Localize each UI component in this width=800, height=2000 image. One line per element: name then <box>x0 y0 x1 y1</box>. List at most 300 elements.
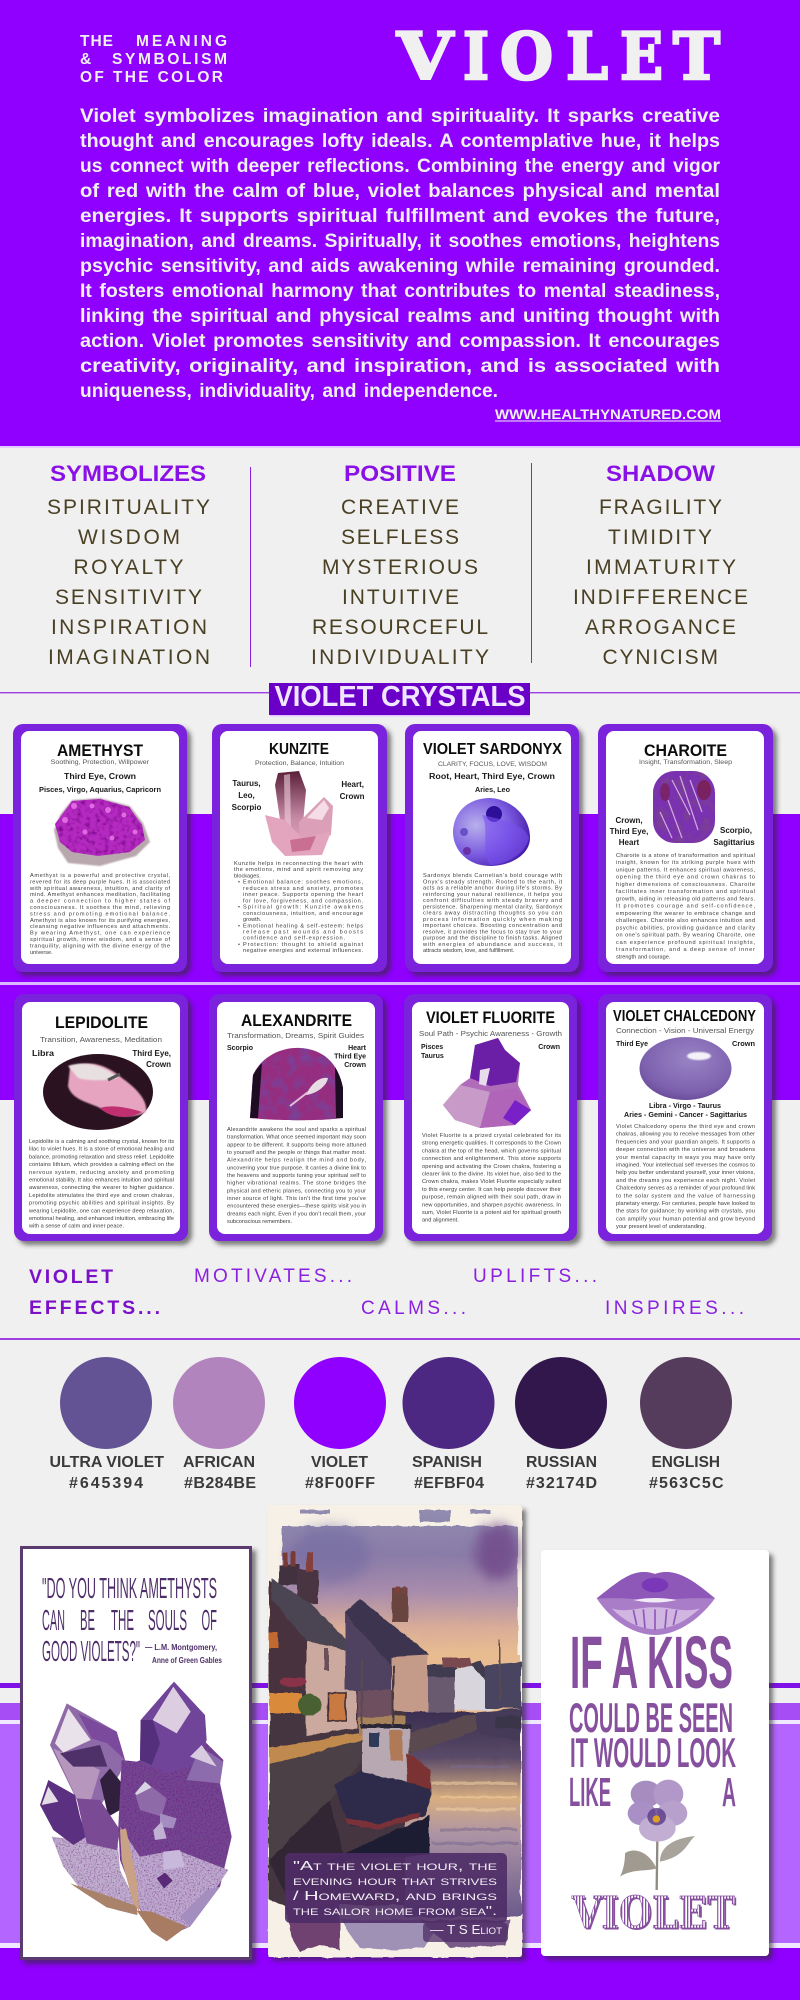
icon: chalcedony stone <box>640 1037 732 1100</box>
card properties: Transition, Awareness, Meditation <box>40 1035 162 1044</box>
card description: facilitates inner transformation and spiritual <box>616 889 755 895</box>
card: kunzite <box>212 724 387 972</box>
header eyebrow: the meaning and symbolism: MEANING <box>136 33 227 50</box>
zodiac label: Aries - Gemini - Cancer - Sagittarius <box>624 1112 747 1119</box>
card: violet sardonyx <box>405 724 579 972</box>
card description: awareness, connecting the wearer to higher guidance. <box>29 1185 174 1191</box>
violet effects text: INSPIRES... <box>605 1298 744 1319</box>
card title: AMETHYST <box>57 741 144 760</box>
intro paragraph: linking the spiritual and physical realms and uniting thought with <box>80 306 720 327</box>
card: alexandrite <box>209 994 383 1241</box>
intro paragraph: of red with the calm of blue, violet balances physical and mental <box>80 181 720 202</box>
zodiac label <box>624 1103 747 1119</box>
middle house <box>345 1600 392 1690</box>
card description: reduces stress and anxiety, promotes <box>243 886 363 892</box>
zodiac label <box>421 1044 444 1060</box>
card description: cleansing negative influences and attachments. <box>30 924 170 930</box>
card description: empowering the wearer to embrace change and <box>616 911 755 917</box>
card description: Amethyst is also known for its purifying energies, <box>30 918 170 924</box>
card description <box>422 1133 562 1224</box>
water <box>405 1712 521 1917</box>
card description: It promotes courage and self-confidence, <box>616 904 755 910</box>
card description: reinforcing your natural resilience, it helps you <box>423 892 562 898</box>
quote headline <box>569 1621 736 1815</box>
quote card: amethysts: "DO YOU THINK AMETHYSTS <box>42 1573 217 1605</box>
card description: strong energetic qualities. It corresponds to the Crown <box>422 1141 561 1147</box>
cream house wall <box>306 1640 357 1735</box>
card description: Spiritual growth: Kunzite awakens <box>243 905 363 911</box>
card description: the emotions, mind and spirit removing any <box>234 867 363 873</box>
quote text: CAN <box>42 1605 65 1637</box>
card description: mind. Amethyst enhances meditation, facilitating <box>30 892 170 898</box>
card: charoite <box>598 724 773 972</box>
intro paragraph: It fosters emotional harmony that contributes to mental steadiness, <box>80 281 720 302</box>
card description: new opportunities, and sharpen psychic awareness. In <box>422 1202 561 1208</box>
card description: imagined. Your intellectual self reverses the cosmos to <box>616 1162 755 1168</box>
card description: uncovering your true purpose. It carries a divine link to <box>227 1165 366 1171</box>
card description: with a sense of calm and inner peace. <box>28 1224 124 1230</box>
card description: can experience profound spiritual insights, <box>616 940 755 946</box>
zodiac label <box>232 779 262 812</box>
quote headline: LIKE <box>569 1769 611 1815</box>
chakra label <box>334 1045 367 1069</box>
painting quote text: the sailor home from sea". <box>293 1904 497 1918</box>
card description: resolve, it provides the focus to stay true to your <box>423 929 562 935</box>
painting quote text: evening hour that strives <box>293 1874 497 1888</box>
card description <box>227 1127 366 1225</box>
card properties: CLARITY, FOCUS, LOVE, WISDOM <box>438 761 547 768</box>
card description: Lepidolite is a calming and soothing crystal, known for its <box>29 1139 174 1145</box>
card description: balance, promoting relaxation and stress relief. Lepidolite <box>29 1154 174 1160</box>
card description: encountered these energies—these spirits visit you in <box>227 1204 366 1210</box>
card description: Alexandrite helps realign the mind and body, <box>227 1158 366 1164</box>
column: symbolizes <box>47 461 210 669</box>
card description: contains lithium, which provides a calming effect on the <box>29 1162 174 1168</box>
intro paragraph <box>80 106 721 402</box>
chakra label: Crown <box>538 1044 560 1051</box>
swatch: ultra violet <box>50 1357 164 1492</box>
list: shadow: IMMATURITY <box>586 556 736 579</box>
zodiac label <box>713 826 755 847</box>
card description: consciousness, intuition, and encourage <box>243 911 363 917</box>
card description: chakra at the top of the head, which governs spiritual <box>422 1148 561 1154</box>
swatch: russian <box>515 1357 607 1492</box>
intro paragraph: psychic sensitivity, and aids awakening while remaining grounded. <box>80 256 720 277</box>
main title: L <box>566 19 608 95</box>
card description: nervous system, reducing anxiety and promoting <box>29 1170 174 1176</box>
intro paragraph: thought and encourages lofty ideals. A contemplative hue, it helps <box>80 131 720 152</box>
painting quote text: — T S Eliot <box>430 1923 503 1937</box>
card description: attracts wisdom, love, and fulfillment. <box>423 948 515 954</box>
card: amethyst <box>13 724 187 972</box>
card description: revered for its deep purple hues. It is associated <box>30 879 170 885</box>
swatch: african: #B284BE <box>184 1475 256 1492</box>
card description <box>616 1124 756 1230</box>
heading: shadow: SHADOW <box>606 461 715 486</box>
card description: Alexandrite awakens the soul and sparks a spiritual <box>227 1127 366 1133</box>
lit windows <box>269 1632 278 1648</box>
drip edges <box>268 1900 522 1957</box>
card description: spiritual growth, inner wisdom, and a sense of <box>30 937 170 943</box>
card description: blockages. <box>234 873 261 879</box>
list: shadow: CYNICISM <box>602 646 718 669</box>
card description: emotional stability. It also enhances intuition and spiritual <box>29 1178 174 1184</box>
card description: deeper connection with the universe and broadens <box>616 1147 755 1153</box>
card description: planetary energy. For centuries, people have looked to <box>616 1201 755 1207</box>
card description: Chalcedony serves as a reminder of your profound link <box>616 1186 755 1192</box>
base dark ground <box>269 1640 405 1905</box>
website link: WWW.HEALTHYNATURED.COM <box>495 406 721 422</box>
chakra label: Crown <box>344 1062 366 1069</box>
card description: inner source of light. This isn't the first time you've <box>227 1196 366 1202</box>
card description: your present level of understanding. <box>616 1224 706 1230</box>
zodiac label: Libra - Virgo - Taurus <box>649 1103 721 1110</box>
icon: charoite stone <box>653 771 715 843</box>
card title: VIOLET SARDONYX <box>423 741 563 758</box>
zodiac label: Scorpio <box>227 1045 253 1052</box>
dark left building <box>269 1580 310 1695</box>
card: violet chalcedony <box>598 994 772 1241</box>
quote text: Anne of Green Gables <box>152 1655 222 1665</box>
header eyebrow: the meaning and symbolism <box>80 33 227 86</box>
card description: appear to be different. It supports being more attuned <box>227 1142 366 1148</box>
chakra label: Third Eye, Crown <box>64 771 136 781</box>
illustration: purple lips <box>597 1572 715 1635</box>
card description: physical and etheric planes, connecting you to your <box>227 1188 366 1194</box>
card title: LEPIDOLITE <box>55 1013 148 1032</box>
violet wordmark: VIOLET <box>573 1890 737 1940</box>
card description: and the dreams you experience each night. Violet <box>616 1178 755 1184</box>
chakra label: Third Eye <box>616 1041 648 1048</box>
list: shadow: INDIFFERENCE <box>573 586 748 609</box>
card description: • <box>238 905 240 911</box>
list: symbolizes: ROYALTY <box>74 556 184 579</box>
card description: psychic abilities, providing guidance and clarity <box>616 925 755 931</box>
intro paragraph: Violet symbolizes imagination and spirituality. It sparks creative <box>80 106 720 127</box>
card description: sum, Violet Fluorite is a potent aid for spiritual growth <box>422 1210 561 1216</box>
card description: purpose, remain aligned with their soul path, draw in <box>422 1195 561 1201</box>
card description: transformation. What once seemed important may soon <box>227 1135 366 1141</box>
violet wordmark: VIOLET <box>571 1888 735 1939</box>
swatch: spanish <box>402 1357 494 1492</box>
zodiac label: Scorpio, <box>720 826 752 835</box>
swatch: african: AFRICAN <box>183 1454 255 1471</box>
chakra label: Heart, <box>341 780 364 789</box>
card description: confront difficulties with steady bravery and <box>423 898 562 904</box>
card description: lilac to violet hues. It is a stone of emotional healing and <box>29 1147 174 1153</box>
card properties: Transformation, Dreams, Spirit Guides <box>227 1031 364 1040</box>
intro paragraph: energies. It supports spiritual fulfillment and evokes the future, <box>80 206 720 227</box>
list: shadow <box>573 496 748 669</box>
card description <box>616 853 755 960</box>
painting quote box <box>285 1853 508 1942</box>
card description: insight, known for its striking purple hues with <box>616 860 755 866</box>
card description: can amplify your human potential and grow beyond <box>616 1216 755 1222</box>
zodiac label: Libra <box>32 1049 55 1058</box>
card description: growth. <box>243 917 262 923</box>
zodiac label: Taurus <box>421 1053 444 1060</box>
card description: clearer link to the divine. Its violet hue, also tied to the <box>422 1172 561 1178</box>
list: positive: CREATIVE <box>341 496 459 519</box>
card description: emotional healing, and enhanced intuition, embracing life <box>29 1216 174 1222</box>
header eyebrow: the meaning and symbolism: & <box>80 51 91 68</box>
zodiac label: Aries, Leo <box>475 785 510 794</box>
list: symbolizes: IMAGINATION <box>48 646 210 669</box>
list: positive: RESOURCEFUL <box>312 616 488 639</box>
card description: higher vibrational realms. The stone bridges the <box>227 1181 366 1187</box>
icon: sardonyx stone <box>453 798 530 866</box>
icon: lepidolite stone <box>43 1054 153 1130</box>
card description: for love, forgiveness, and compassion. <box>243 898 363 904</box>
main title: V <box>396 19 455 95</box>
zodiac label: Sagittarius <box>713 838 755 847</box>
header eyebrow: the meaning and symbolism: OF THE COLOR <box>80 69 223 86</box>
swatch: violet: #8F00FF <box>305 1475 375 1492</box>
card description <box>422 873 562 954</box>
card description: Emotional balance: soothes emotions, <box>243 880 363 886</box>
quay <box>269 1732 362 1765</box>
card description: Violet Fluorite is a prized crystal celebrated for its <box>422 1133 561 1139</box>
zodiac label: Leo, <box>238 791 255 800</box>
card description: important choices. Boosting concentration and <box>423 923 562 929</box>
chakra label <box>132 1049 171 1069</box>
card description: Amethyst is a powerful and protective crystal, <box>30 873 170 879</box>
list: shadow: TIMIDITY <box>608 526 712 549</box>
card description: • <box>238 880 240 886</box>
zodiac label: Scorpio <box>232 803 262 812</box>
card description: help you better understand yourself, your inner visions, <box>616 1170 755 1176</box>
intro paragraph: imagination, and dreams. Spiritually, it soothes emotions, heightens <box>80 231 720 252</box>
card description: opening the third eye and crown chakras to <box>616 875 755 881</box>
list: positive: INTUITIVE <box>342 586 459 609</box>
swatch: ultra violet: #645394 <box>69 1475 143 1492</box>
card description: confidence and self-expression. <box>243 936 345 942</box>
intro paragraph: creativity, originality, and inspiration, and is associated with <box>80 356 720 377</box>
swatch: english <box>640 1357 732 1492</box>
card description: tranquility, aligning with the divine energy of the <box>30 943 170 949</box>
card description: chakras, allowing you to receive messages from other <box>616 1132 755 1138</box>
header eyebrow: the meaning and symbolism: THE <box>80 33 113 50</box>
card description: to this energy center. It can help people discover their <box>422 1187 561 1193</box>
icon: amethyst cluster <box>54 798 150 866</box>
list: positive <box>311 496 489 669</box>
card title: CHAROITE <box>644 741 727 760</box>
card description: Emotional healing & self-esteem: helps <box>243 923 363 929</box>
zodiac label: Pisces <box>421 1044 443 1051</box>
header panel <box>0 0 800 448</box>
main roof <box>272 1578 358 1652</box>
card description: dreams each night. Even if you don't recall them, your <box>227 1211 366 1217</box>
card properties: Connection - Vision - Universal Energy <box>616 1026 754 1035</box>
card description: release past wounds and boosts <box>243 930 363 936</box>
list: positive: MYSTERIOUS <box>322 556 478 579</box>
quote card: if a kiss: A <box>722 1769 736 1815</box>
list: positive: SELFLESS <box>341 526 459 549</box>
card description: unique patterns. It enhances spiritual awareness, <box>616 868 755 874</box>
violet effects text <box>29 1266 744 1319</box>
card description: By wearing Amethyst, one can experience <box>30 931 170 937</box>
card description: the heavens and supports tuning your spiritual self to <box>227 1173 366 1179</box>
swatch: ultra violet: ULTRA VIOLET <box>50 1454 164 1471</box>
list: shadow: FRAGILITY <box>599 496 722 519</box>
card description: your mental capacity in ways you may have only <box>616 1155 755 1161</box>
card description: Kunzite helps in reconnecting the heart with <box>234 861 363 867</box>
card description: subconscious remembers. <box>227 1219 292 1225</box>
quote text: THE <box>111 1605 134 1637</box>
chakra label: Third Eye <box>334 1054 366 1060</box>
card: lepidolite <box>14 994 188 1241</box>
card description <box>28 1139 174 1230</box>
violet effects text: MOTIVATES... <box>194 1266 352 1287</box>
card description: persistence. Sharpening mental clarity, Sardonyx <box>423 904 562 910</box>
illustration: harbor scene <box>268 1508 522 1957</box>
swatch: russian: RUSSIAN <box>526 1454 597 1471</box>
card description: Charoite is a stone of transformation and spiritual <box>616 853 755 859</box>
painting quote text <box>293 1859 503 1937</box>
list: symbolizes: SPIRITUALITY <box>47 496 210 519</box>
card description: consciousness. It soothes the mind, relieving <box>30 905 170 911</box>
painting quote text: / Homeward, and brings <box>293 1889 497 1903</box>
column: shadow <box>573 461 748 669</box>
header eyebrow: the meaning and symbolism: SYMBOLISM <box>112 51 227 68</box>
quote text: BE <box>80 1605 95 1637</box>
quote card: amethysts <box>22 1548 250 1958</box>
chakra label right: Crown <box>732 1041 755 1048</box>
card properties: Soul Path - Psychic Awareness - Growth <box>419 1029 562 1038</box>
card description: • <box>238 942 240 948</box>
swatch: english: ENGLISH <box>652 1454 720 1471</box>
chakra label: Third Eye, <box>132 1049 171 1058</box>
distant houses <box>428 1665 455 1712</box>
quote text: SOULS <box>148 1605 187 1637</box>
boat <box>333 1770 432 1828</box>
chakra label <box>610 816 648 847</box>
card title: KUNZITE <box>269 741 329 758</box>
card description: • <box>238 923 240 929</box>
card description: challenges. Charoite also enhances intuition and <box>616 918 755 924</box>
chakra label: Heart <box>619 838 640 847</box>
illustration: amethyst cluster <box>40 1682 232 1941</box>
card description: negative energies and external influences. <box>243 948 363 954</box>
zodiac label: Taurus, <box>232 779 261 788</box>
icon: kunzite crystal <box>265 771 333 856</box>
card description: with spiritual awareness, intuition, and clarity of <box>29 886 170 892</box>
quote card: if a kiss <box>541 1550 769 1956</box>
card description: with energies of abundance and success, it <box>422 942 562 948</box>
card description: process information quickly when making <box>423 917 562 923</box>
column: positive <box>311 461 489 669</box>
card description: universe. <box>30 950 53 956</box>
chakra label: Third Eye, <box>610 827 648 836</box>
card description: clears away distracting thoughts so you can <box>423 910 562 916</box>
card description: stress and promoting emotional balance. <box>30 911 170 917</box>
quote text: — L.M. Montgomery, <box>145 1642 217 1652</box>
swatch: spanish: #EFBF04 <box>414 1475 484 1492</box>
icon: alexandrite stone <box>250 1048 343 1120</box>
card description: the stars for guidance; by working with crystals, you <box>616 1209 755 1215</box>
card description: growth, aiding in releasing old patterns and fears. <box>616 896 755 902</box>
card description: transformation, and a deep sense of inner <box>616 947 755 953</box>
violet effects text: UPLIFTS... <box>473 1266 597 1287</box>
swatch: violet: VIOLET <box>311 1454 368 1471</box>
chakra label: Crown <box>340 792 365 801</box>
card properties: Soothing, Protection, Willpower <box>51 759 150 766</box>
quote text: OF <box>202 1605 217 1637</box>
card title: VIOLET FLUORITE <box>426 1009 555 1027</box>
violet effects text: VIOLET <box>29 1266 113 1288</box>
card description: on one's spiritual path. By wearing Charoite, one <box>616 933 755 939</box>
main title: T <box>673 19 720 95</box>
card description: frequencies and your guardian angels. It supports a <box>616 1139 756 1145</box>
list: shadow: ARROGANCE <box>585 616 736 639</box>
violet effects text: EFFECTS... <box>29 1297 160 1319</box>
heading: symbolizes: SYMBOLIZES <box>50 461 206 486</box>
swatch: african <box>173 1357 265 1492</box>
card description: Sardonyx blends Carnelian's bold courage with <box>423 873 562 879</box>
main title: I <box>463 19 489 95</box>
main title <box>396 19 720 95</box>
main title: E <box>620 19 663 95</box>
card description: to the solar system and the value of harnessing <box>616 1193 755 1199</box>
card properties: Insight, Transformation, Sleep <box>639 759 732 766</box>
swatch: violet <box>294 1357 386 1492</box>
intro paragraph: uniqueness, individuality, and independence. <box>80 381 498 402</box>
card description: higher dimensions of consciousness. Charoite <box>616 882 755 888</box>
intro paragraph: action. Violet promotes sensitivity and compassion. It encourages <box>80 331 720 352</box>
list: symbolizes: INSPIRATION <box>51 616 207 639</box>
painting quote text: "At the violet hour, the <box>293 1859 497 1873</box>
card title: VIOLET CHALCEDONY <box>613 1008 757 1025</box>
card description: to yourself and the people or things that matter most. <box>227 1150 366 1156</box>
icon: fluorite crystal <box>443 1038 531 1128</box>
card description: acts as a reliable anchor during life's storms. By <box>423 886 562 892</box>
list: symbolizes: WISDOM <box>78 526 180 549</box>
section heading: violet crystals: VIOLET CRYSTALS <box>274 681 526 713</box>
painting card: harbor at dusk <box>268 1505 522 1957</box>
card description: Onyx's steady strength. Rooted to the earth, it <box>423 879 562 885</box>
swatch: russian: #32174D <box>526 1475 597 1492</box>
card description: Lepidolite stimulates the third eye and crown chakras, <box>29 1193 174 1199</box>
card description: wearing Lepidolite, one can experience deep relaxation, <box>28 1208 174 1214</box>
card description: inner peace. Supports opening the heart <box>243 892 363 898</box>
card description: connection and enlightenment. This stone supports <box>422 1156 561 1162</box>
stone wall lower left <box>269 1740 362 1860</box>
chakra label: Heart <box>348 1045 367 1052</box>
card description <box>29 873 170 956</box>
quote text: GOOD VIOLETS?" <box>42 1636 140 1668</box>
chakra label <box>340 780 365 801</box>
card description: promoting psychic abilities and spiritual insights. By <box>29 1201 174 1207</box>
chakra label: Crown <box>146 1060 171 1069</box>
card: violet fluorite <box>404 994 577 1241</box>
swatch: spanish: SPANISH <box>412 1454 482 1471</box>
card description <box>234 861 363 954</box>
card description: Violet Chalcedony opens the third eye and crown <box>616 1124 755 1130</box>
card description: Protection: thought to shield against <box>243 942 363 948</box>
card description: a deeper connection to higher states of <box>30 899 170 905</box>
list: symbolizes <box>47 496 210 669</box>
card description: strength and courage. <box>616 954 671 960</box>
violet effects text: CALMS... <box>361 1298 466 1319</box>
card description: opening and activating the Crown chakra, fostering a <box>422 1164 562 1170</box>
card description: Crown chakra, makes Violet Fluorite especially suited <box>422 1179 561 1185</box>
color swatches <box>50 1357 732 1492</box>
chakra label: Crown, <box>615 816 643 825</box>
swatch: english: #563C5C <box>649 1475 724 1492</box>
intro paragraph: us connect with deeper reflections. Combining the energy and vigor <box>80 156 721 177</box>
quote text <box>42 1573 222 1668</box>
list: positive: INDIVIDUALITY <box>311 646 489 669</box>
